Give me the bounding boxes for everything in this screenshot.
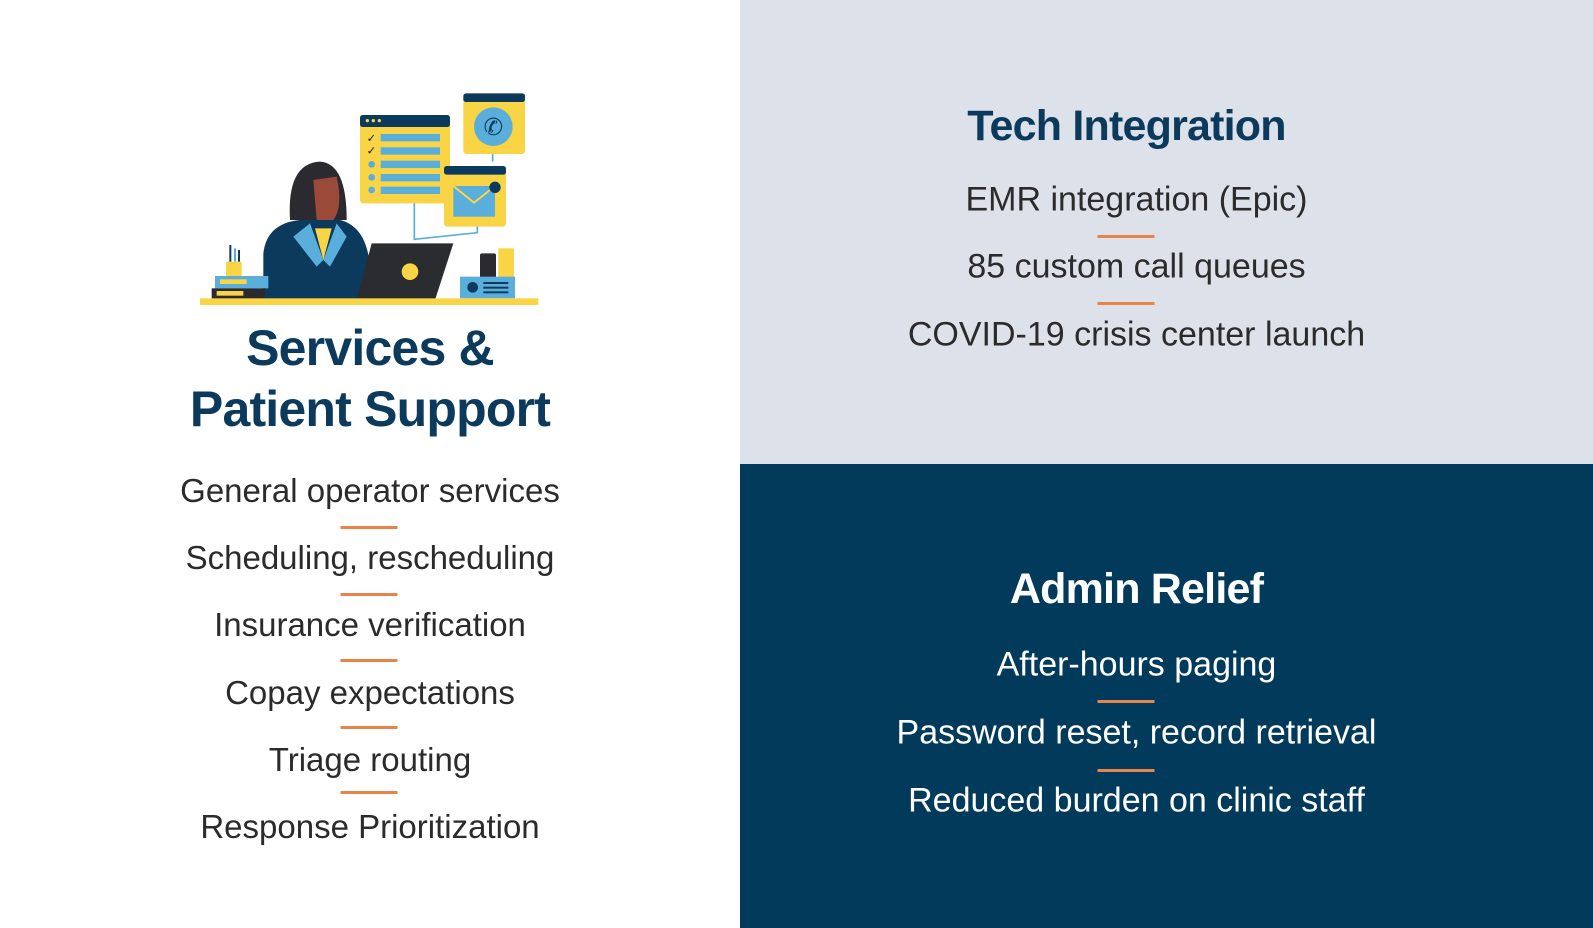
connectors	[414, 198, 477, 239]
heading: tech integration: Tech Integration	[967, 102, 1286, 150]
list: services items: General operator services	[180, 472, 560, 509]
illustration: receptionist at desk: ✓	[367, 146, 376, 158]
phone window	[463, 93, 525, 154]
illustration: receptionist at desk: ✓	[367, 133, 376, 145]
heading: admin relief: Admin Relief	[1010, 565, 1263, 613]
list: admin items: Password reset, record retrieval	[897, 714, 1376, 752]
list: admin items	[897, 646, 1376, 820]
list: services items	[180, 472, 560, 845]
panel: tech integration	[740, 0, 1593, 464]
woman	[290, 162, 347, 220]
email window	[444, 166, 506, 227]
heading: services: Services &	[246, 320, 494, 376]
heading: services: Patient Support	[190, 381, 550, 437]
list: tech items: 85 custom call queues	[967, 248, 1306, 286]
panel: admin relief	[740, 464, 1593, 928]
list: services items: Scheduling, rescheduling	[186, 539, 554, 576]
list: tech items	[908, 180, 1365, 354]
list: admin items: After-hours paging	[997, 646, 1276, 684]
desk phone	[498, 248, 514, 278]
checklist window	[360, 115, 450, 203]
books and pens	[215, 276, 268, 288]
list: services items: Insurance verification	[214, 606, 526, 643]
laptop	[357, 243, 453, 300]
panel: left services	[180, 93, 560, 845]
list: admin items: Reduced burden on clinic staff	[908, 782, 1365, 820]
illustration: receptionist at desk: ✆	[484, 114, 503, 140]
heading: services	[190, 320, 550, 437]
list: tech items: EMR integration (Epic)	[965, 180, 1308, 218]
list: tech items: COVID-19 crisis center launch	[908, 316, 1365, 354]
list: services items: Copay expectations	[225, 674, 515, 711]
list: services items: Triage routing	[269, 741, 471, 778]
list: services items: Response Prioritization	[200, 808, 540, 845]
illustration: receptionist at desk	[200, 93, 538, 305]
desk	[200, 298, 538, 305]
